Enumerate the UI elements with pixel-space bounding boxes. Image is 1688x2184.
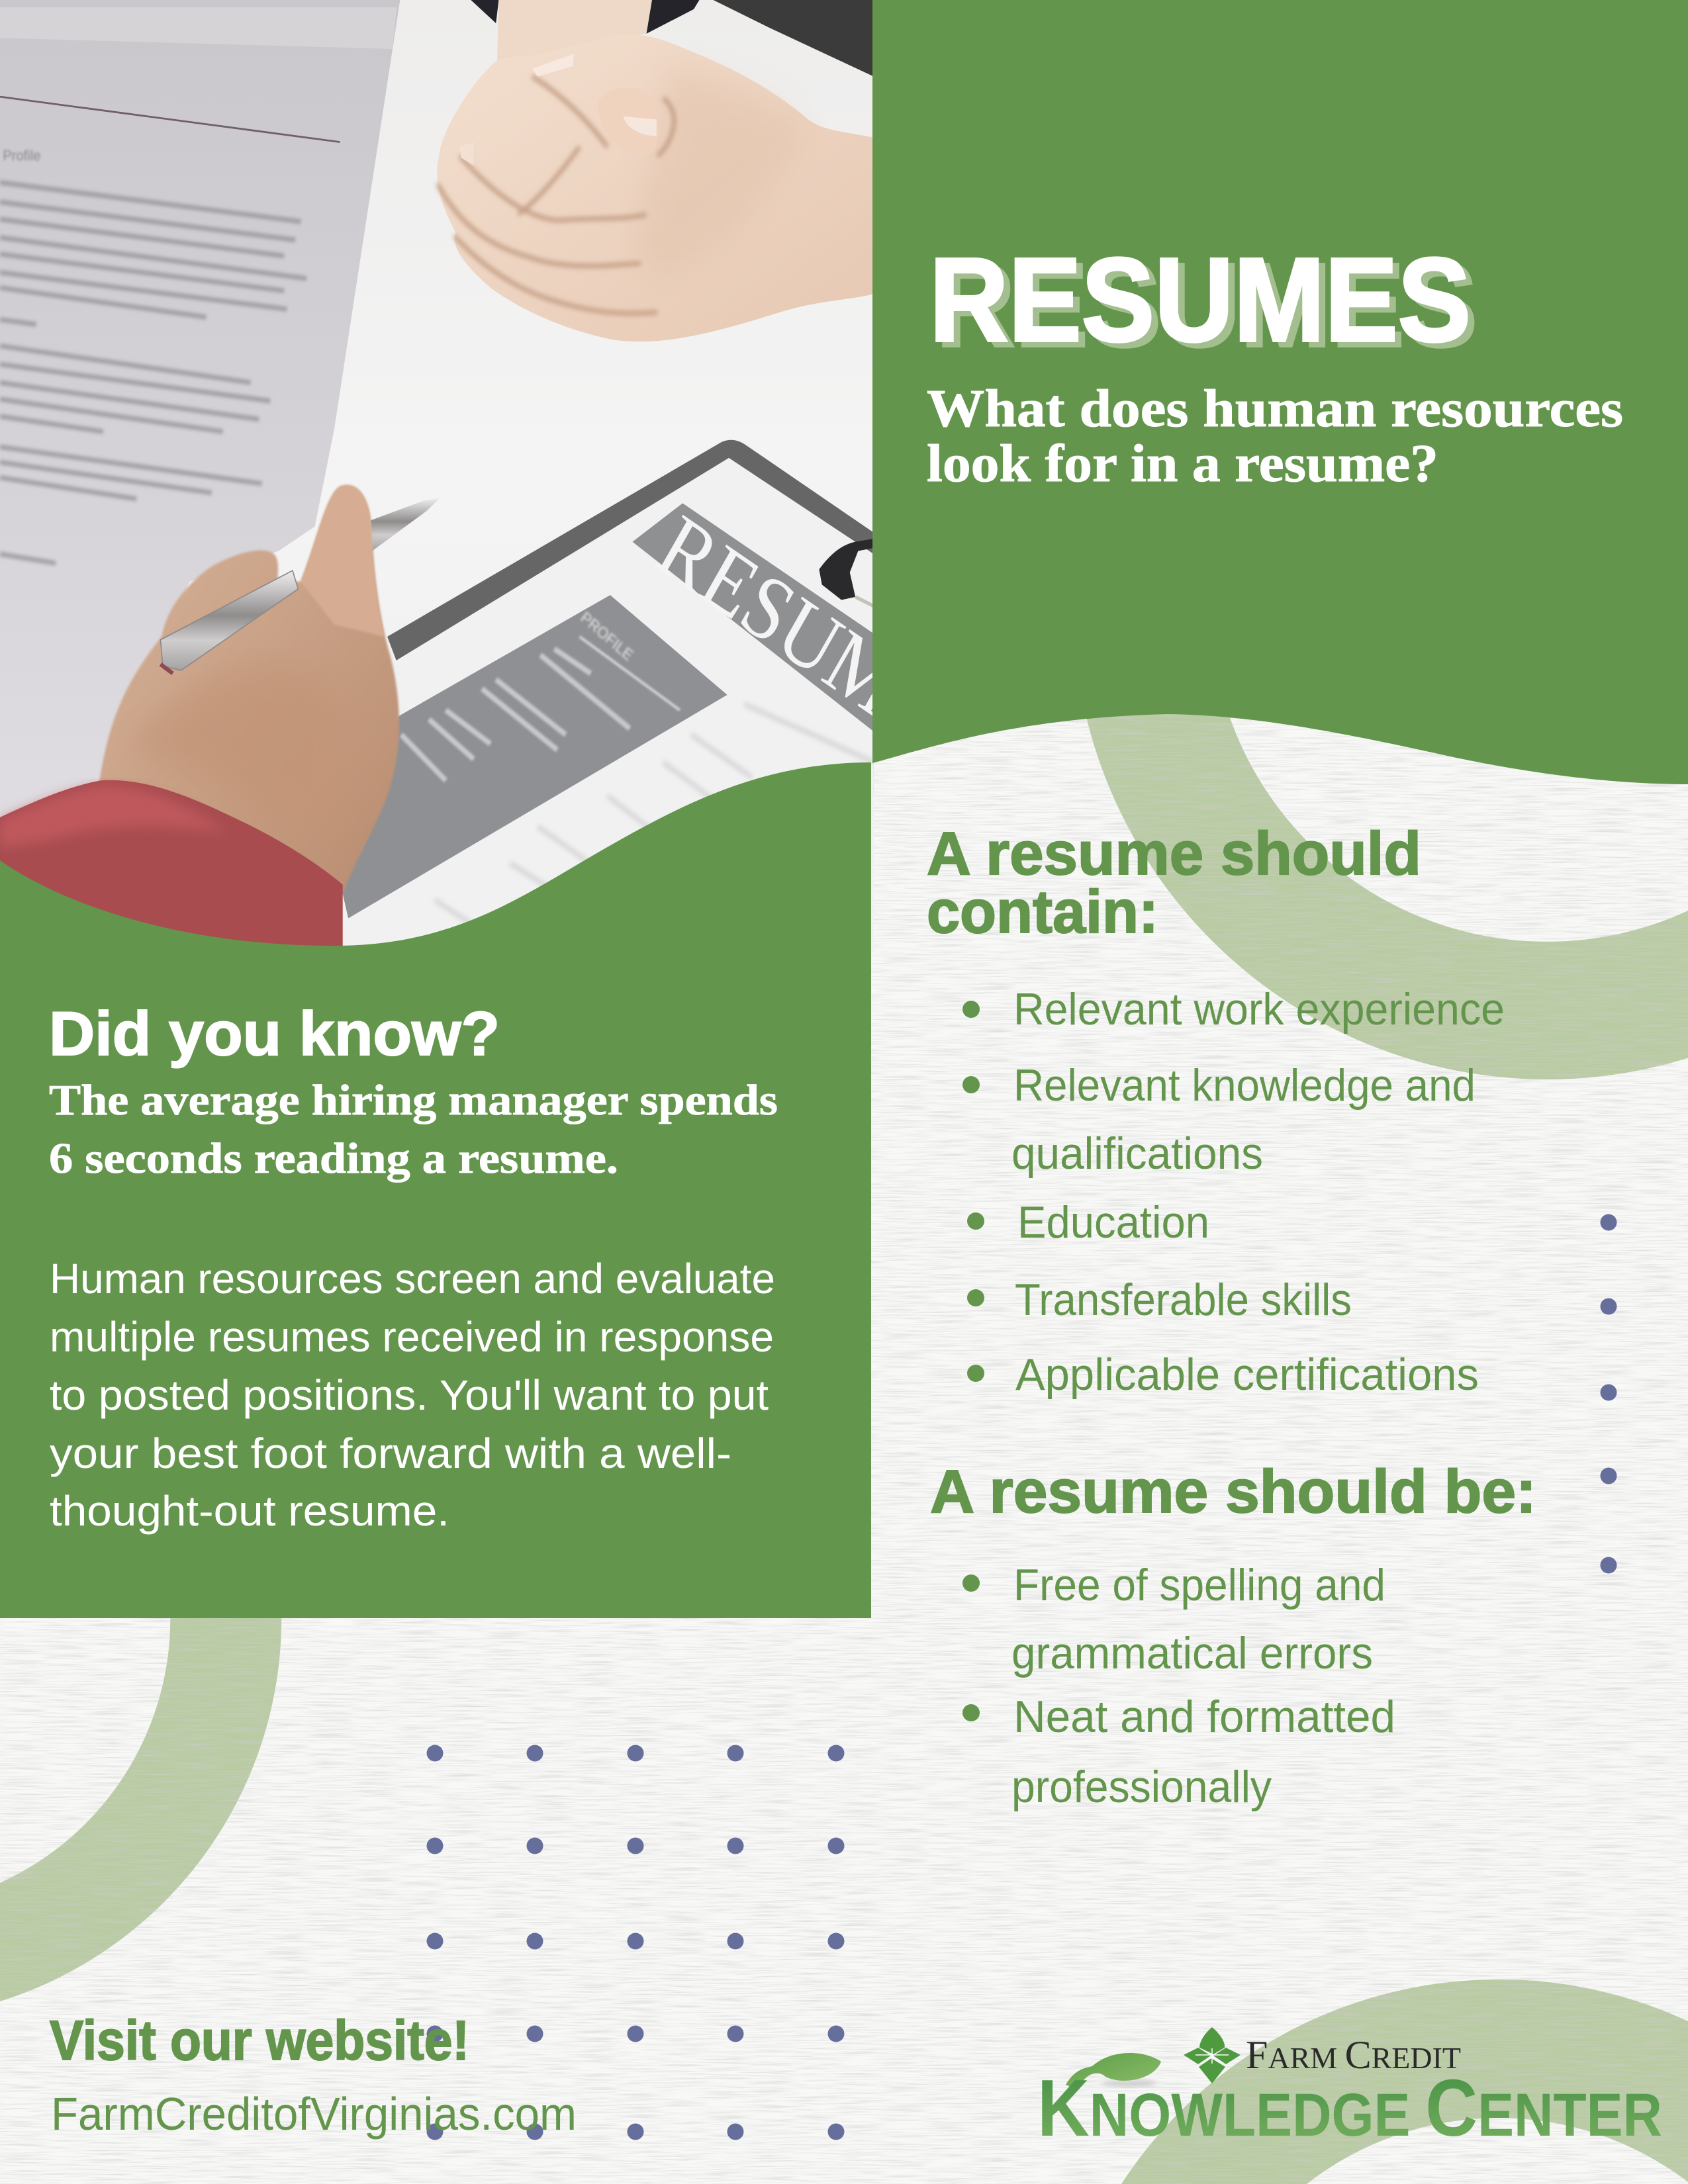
text block: human resources paragraph: [50, 1255, 775, 1535]
decorative ring: lower left: [0, 1608, 281, 2001]
text: farm credit: FARM CREDIT: [1246, 2033, 1461, 2077]
photo: hands reviewing a resume: RESUME: [642, 495, 956, 763]
icon: leaf: [1066, 2053, 1161, 2090]
photo: hands reviewing a resume: Profile: [3, 148, 40, 164]
text block: human resources paragraph: Human resources screen and evaluate: [50, 1255, 775, 1302]
text block: human resources paragraph: multiple resumes received in response: [50, 1313, 774, 1361]
hands: [497, 0, 652, 64]
panel: top green header: [872, 0, 1688, 784]
text block: human resources paragraph: thought-out resume.: [50, 1487, 449, 1535]
link: website address: FarmCreditofVirginias.com: [51, 2088, 577, 2140]
list: a resume should be: professionally: [1011, 1762, 1272, 1812]
text block: human resources paragraph: to posted positions. You'll want to put: [50, 1371, 769, 1419]
stat: hiring manager: [49, 1076, 778, 1183]
icon: farm credit diamond: [1184, 2027, 1241, 2083]
subtitle: What does human resources: [927, 380, 1623, 438]
subtitle: [927, 380, 1623, 493]
title: RESUMES: [929, 234, 1471, 367]
list: a resume should contain: [962, 984, 1505, 1400]
stat: hiring manager: The average hiring manager spends: [49, 1076, 778, 1124]
photo: hands reviewing a resume: [0, 0, 956, 952]
hand holding pen: [95, 485, 399, 893]
list: a resume should be: Free of spelling and: [1013, 1560, 1385, 1610]
logo: farm credit knowledge center: [1037, 2027, 1662, 2153]
dot grid: bottom centre: [426, 1745, 845, 2140]
subtitle: look for in a resume?: [927, 435, 1438, 493]
photo: hands reviewing a resume: PROFILE: [578, 608, 637, 664]
heading: a resume should contain: contain:: [927, 878, 1158, 946]
list: a resume should contain: Relevant knowledge and: [1013, 1060, 1476, 1111]
text block: human resources paragraph: your best foot forward with a well-: [50, 1430, 731, 1477]
decorative ring: lower right: [1121, 1979, 1688, 2184]
panel: left green did-you-know: [0, 762, 871, 1618]
list: a resume should contain: Relevant work experience: [1013, 984, 1505, 1034]
list: a resume should be: grammatical errors: [1011, 1628, 1373, 1678]
list: a resume should be: [962, 1560, 1395, 1812]
dot grid: right column: [1601, 1214, 1617, 1574]
title: RESUMES: [936, 239, 1477, 372]
text: knowledge center: KNOWLEDGE CENTER: [1037, 2063, 1662, 2153]
heading: a resume should contain: [927, 820, 1421, 946]
clipboard: [387, 440, 874, 796]
stat: hiring manager: 6 seconds reading a resume.: [49, 1134, 618, 1183]
heading: did you know: Did you know?: [49, 999, 500, 1068]
list: a resume should contain: Applicable certifications: [1015, 1349, 1479, 1400]
list: a resume should contain: Transferable skills: [1015, 1275, 1352, 1325]
decorative ring: upper right: [1076, 662, 1688, 1079]
red sleeve: [0, 780, 343, 952]
list: a resume should contain: qualifications: [1011, 1128, 1263, 1179]
heading: a resume should contain: A resume should: [927, 820, 1421, 887]
heading: a resume should be: A resume should be:: [930, 1458, 1536, 1525]
list: a resume should be: Neat and formatted: [1013, 1692, 1395, 1742]
list: a resume should contain: Education: [1017, 1197, 1209, 1248]
heading: visit our website: Visit our website!: [50, 2009, 469, 2071]
